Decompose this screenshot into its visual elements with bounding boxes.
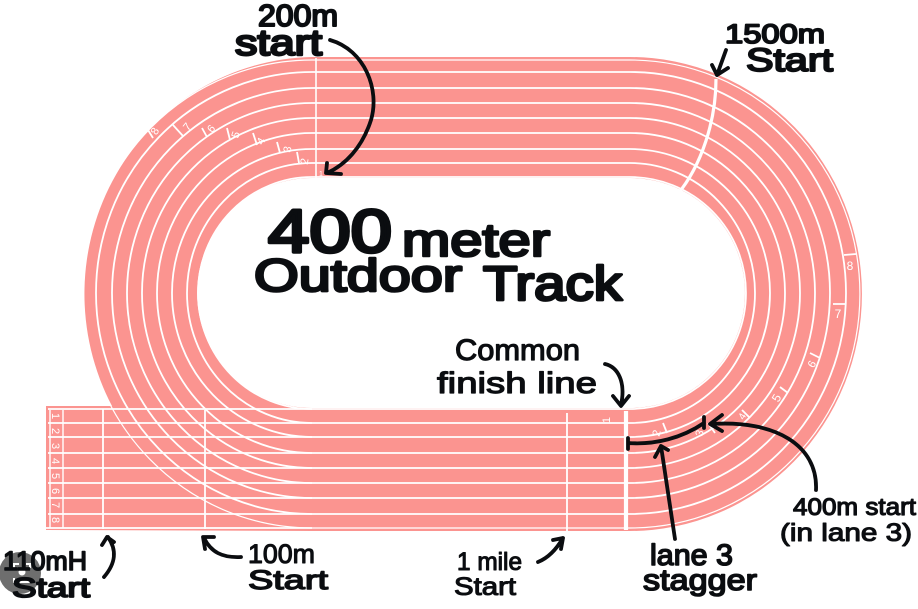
arrow: 1500m start — [712, 50, 728, 75]
arrow: 100m start — [203, 537, 241, 557]
1500m start line — [677, 79, 716, 195]
lane numbers: 200m stagger: 5 — [229, 130, 243, 140]
lane numbers: starting block: 6 — [49, 488, 61, 494]
lane numbers: starting block: 4 — [49, 458, 61, 464]
arrow: 110m hurdles start — [102, 537, 114, 577]
lane numbers: 200m stagger: 4 — [255, 136, 268, 147]
label: lane 3 stagger — [643, 539, 757, 597]
lane numbers: starting block: 1 — [49, 413, 61, 419]
title: Track — [483, 258, 623, 311]
lane numbers: 200m stagger: 7 — [181, 121, 194, 133]
label: common finish line — [437, 334, 597, 400]
label: 1500m start — [725, 19, 833, 78]
lane numbers: 400m stagger — [601, 259, 854, 438]
label: 400m start in lane 3 — [780, 494, 916, 547]
label: 100m start: Start — [248, 565, 329, 595]
lane numbers: 400m stagger: 8 — [847, 259, 854, 273]
lane stagger ticks — [148, 125, 856, 433]
lane numbers: starting block: 3 — [49, 443, 61, 449]
title — [254, 198, 623, 311]
lane numbers: 400m stagger: 6 — [806, 359, 819, 370]
arrow: common finish line — [605, 364, 629, 406]
label: 100m start: 100m — [248, 539, 315, 569]
label: 1 mile start: Start — [454, 573, 516, 601]
label: 1500m start: Start — [746, 42, 833, 78]
label: 1500m start: 1500m — [725, 19, 825, 49]
lane lines — [46, 60, 860, 528]
lane numbers: 400m stagger: 4 — [737, 411, 749, 422]
arrow: 200m start — [326, 40, 374, 174]
lane numbers: starting block — [49, 413, 61, 523]
start lines on the straights — [50, 58, 567, 531]
lane numbers: starting block: 8 — [49, 517, 61, 523]
title: Outdoor — [254, 250, 462, 301]
label: 110m hurdles start — [3, 546, 90, 603]
lane numbers: starting block: 5 — [49, 473, 61, 479]
label: 400m start in lane 3: (in lane 3) — [780, 519, 912, 547]
lane numbers: 400m stagger: 5 — [769, 391, 784, 404]
label: 100m start — [248, 539, 329, 595]
bracket: lane 3 stagger — [628, 417, 704, 449]
lane numbers: starting block: 2 — [49, 428, 61, 434]
lane numbers: 200m stagger: 1 — [319, 171, 323, 178]
lane numbers: 200m stagger: 6 — [205, 123, 218, 135]
lane numbers: 200m stagger — [149, 121, 323, 178]
label: common finish line: finish line — [437, 367, 597, 400]
arrow: lane 3 stagger — [655, 446, 675, 539]
lane numbers: 400m stagger: 2 — [651, 429, 664, 438]
label: 1 mile start — [454, 548, 522, 601]
lane numbers: starting block: 7 — [49, 502, 61, 508]
label: 110m hurdles start: 110mH — [3, 546, 87, 576]
label: 400m start in lane 3: 400m start — [793, 494, 916, 521]
lane numbers: 400m stagger: 7 — [835, 307, 842, 321]
arrow: 1 mile start — [538, 538, 563, 562]
label: lane 3 stagger: lane 3 — [650, 539, 733, 572]
lane numbers: 200m stagger: 2 — [299, 157, 311, 166]
lane numbers: 200m stagger: 8 — [149, 126, 162, 137]
title: 400 — [268, 198, 392, 265]
label: 200m start: start — [235, 22, 322, 63]
arrow: 400m start — [710, 415, 816, 490]
lane numbers: 400m stagger: 1 — [601, 417, 613, 423]
track surface — [46, 57, 862, 531]
label: 1 mile start: 1 mile — [457, 548, 522, 576]
icon: lens badge — [0, 552, 41, 594]
label: common finish line: Common — [455, 334, 580, 367]
label: lane 3 stagger: stagger — [643, 564, 757, 597]
label: 110m hurdles start: Start — [12, 572, 90, 603]
label: 200m start — [235, 0, 338, 63]
lane numbers: 200m stagger: 3 — [282, 145, 294, 154]
lane numbers: 400m stagger: 3 — [694, 429, 707, 438]
title: meter — [402, 214, 550, 266]
common finish line — [624, 411, 628, 530]
